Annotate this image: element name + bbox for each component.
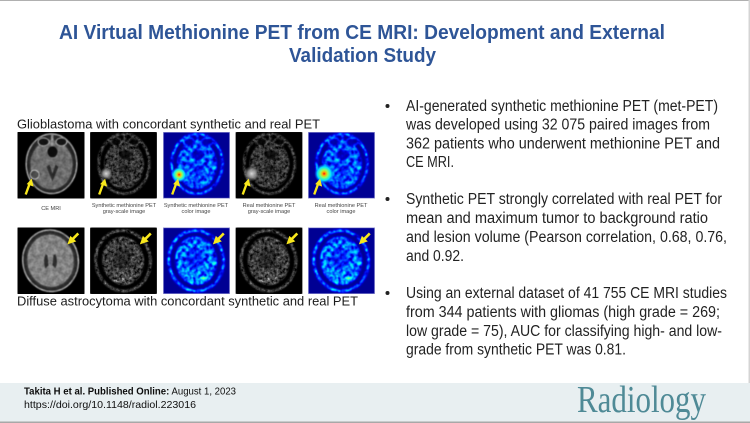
panel captions: Synthetic methionine PET bbox=[164, 203, 229, 209]
arrow bbox=[314, 179, 322, 195]
bullet: external validation: from 344 patients with gliomas (high grade = 269; bbox=[406, 304, 720, 321]
citation: Takita H et al. Published Online: August 1, 2023 bbox=[24, 386, 236, 398]
arrow bbox=[213, 233, 224, 244]
arrow bbox=[243, 179, 251, 195]
panel: astrocytoma synthetic color PET bbox=[163, 227, 230, 295]
panel: glioblastoma real color PET bbox=[308, 132, 375, 198]
panel captions: color image bbox=[182, 209, 210, 215]
bullet: correlation with real PET: mean and maximum tumor to background ratio bbox=[406, 210, 708, 227]
panel captions: CE MRI bbox=[41, 206, 61, 212]
arrow bbox=[67, 233, 78, 244]
bullet: external validation: grade from synthetic PET was 0.81. bbox=[406, 342, 626, 358]
bullet: correlation with real PET: and lesion volume (Pearson correlation, 0.68, 0.76, bbox=[406, 229, 727, 246]
panel: astrocytoma CE MRI bbox=[18, 226, 84, 295]
arrow bbox=[140, 233, 151, 244]
heading: astrocytoma row: Diffuse astrocytoma with concordant synthetic and real PET bbox=[17, 294, 358, 308]
Radiology logo: Radiology bbox=[577, 379, 706, 421]
arrow bbox=[26, 179, 34, 195]
arrow bbox=[172, 179, 180, 195]
panel captions: gray-scale image bbox=[248, 209, 290, 215]
panel captions: color image bbox=[327, 209, 355, 215]
panel: astrocytoma real gray PET bbox=[236, 227, 302, 295]
bullet: synthetic PET development: 362 patients who underwent methionine PET and bbox=[406, 136, 720, 152]
panel captions: Real methionine PET bbox=[243, 203, 296, 209]
panel captions: gray-scale image bbox=[103, 209, 145, 215]
bullet: synthetic PET development: was developed using 32 075 paired images from bbox=[405, 116, 710, 134]
bullet: external validation: low grade = 75), AUC for classifying high- and low- bbox=[406, 323, 722, 340]
bullet: synthetic PET development: CE MRI. bbox=[406, 154, 454, 171]
bullet: correlation with real PET bbox=[386, 191, 727, 265]
panel: astrocytoma real color PET bbox=[308, 227, 375, 295]
heading: glioblastoma row: Glioblastoma with concordant synthetic and real PET bbox=[17, 118, 320, 132]
citation: https://doi.org/10.1148/radiol.223016 bbox=[24, 399, 196, 411]
panel captions: Real methionine PET bbox=[315, 203, 368, 209]
title: AI Virtual Methionine PET from CE MRI: Development and External bbox=[59, 22, 665, 44]
bullet: correlation with real PET: and 0.92. bbox=[406, 248, 464, 265]
bullet: synthetic PET development bbox=[386, 98, 720, 171]
panel: glioblastoma CE MRI bbox=[18, 132, 84, 198]
panel: glioblastoma synthetic gray PET bbox=[90, 132, 157, 198]
arrow bbox=[286, 233, 297, 244]
bullet: synthetic PET development: AI-generated synthetic methionine PET (met-PET) bbox=[406, 98, 718, 115]
arrow bbox=[359, 233, 370, 244]
panel: glioblastoma real gray PET bbox=[236, 132, 302, 198]
arrow bbox=[99, 179, 107, 195]
footer band bbox=[0, 383, 750, 423]
bullet: correlation with real PET: Synthetic PET strongly correlated with real PET for bbox=[406, 191, 722, 208]
panel captions: Synthetic methionine PET bbox=[92, 203, 157, 209]
panel captions bbox=[41, 203, 368, 215]
citation bbox=[24, 386, 236, 411]
panel: astrocytoma synthetic gray PET bbox=[90, 227, 157, 295]
bullet: external validation bbox=[386, 285, 727, 358]
title: Validation Study bbox=[289, 45, 437, 67]
panel: glioblastoma synthetic color PET bbox=[163, 132, 230, 198]
title bbox=[59, 22, 665, 67]
